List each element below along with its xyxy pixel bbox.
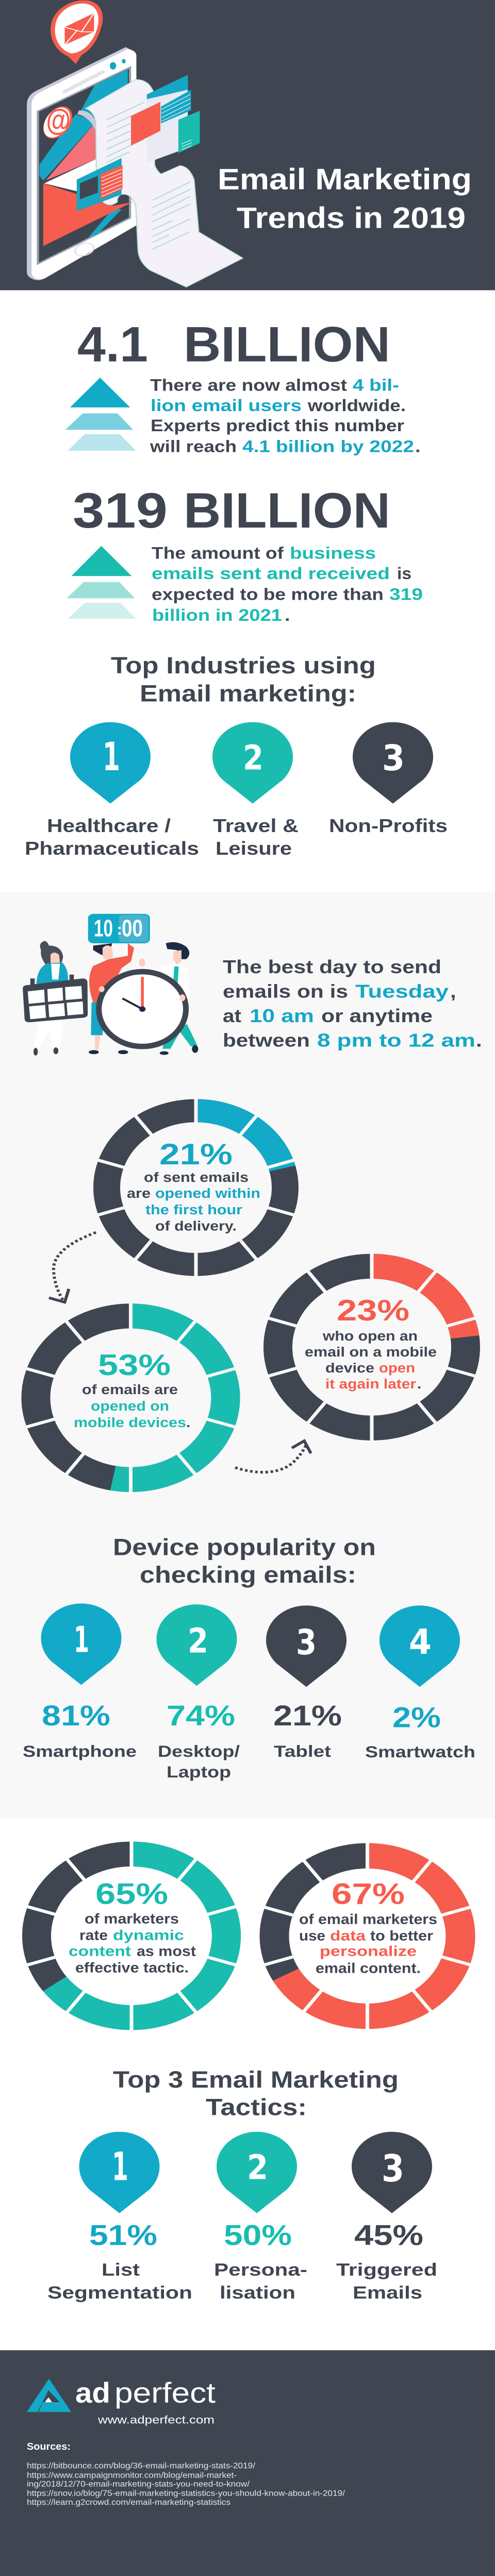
donut: 21% opened within first hour: are xyxy=(127,1186,151,1200)
device 1: smartphone: 81% xyxy=(42,1700,110,1732)
tactic 1: list segmentation: Segmentation xyxy=(47,2282,192,2302)
title: Email Marketing xyxy=(218,163,472,196)
donut: 23% open again later: it again later xyxy=(325,1377,416,1392)
donut: 53% opened on mobile: mobile devices xyxy=(74,1415,186,1430)
sources list: https://bitbounce.com/blog/36-email-marketing-stats-2019/ xyxy=(27,2461,255,2470)
device 2: desktop laptop: 2 xyxy=(188,1621,208,1660)
icon: at symbol xyxy=(38,103,77,141)
donut: 67% personalize: of email marketers xyxy=(299,1911,437,1927)
donut: 53% opened on mobile: opened on xyxy=(91,1399,169,1414)
tactic 2: personalisation xyxy=(214,2132,307,2302)
pin 2 xyxy=(212,722,293,804)
donut: 53% opened on mobile: 53% xyxy=(98,1348,171,1382)
donut: 21% opened within first hour: opened within xyxy=(155,1186,260,1200)
labels: Leisure xyxy=(216,838,292,859)
big number: 319 xyxy=(73,483,168,538)
donut: 23% open again later: email on a mobile xyxy=(305,1345,437,1359)
logo: adperfect: perfect xyxy=(114,2377,216,2409)
pin 3 xyxy=(353,722,433,804)
tactic 3: triggered emails: Triggered xyxy=(336,2259,437,2279)
text: email users: 4 bil- xyxy=(353,376,399,395)
digital clock digits: 10 xyxy=(94,914,113,942)
tactic 3: triggered emails xyxy=(336,2132,437,2302)
device 3: tablet: Tablet xyxy=(274,1743,331,1761)
tactic 1: list segmentation: 1 xyxy=(112,2144,128,2190)
icon: teal pyramid xyxy=(67,546,136,619)
donut: 67% personalize: email content. xyxy=(316,1960,421,1976)
heading xyxy=(113,2066,399,2121)
device 1: smartphone: Smartphone xyxy=(23,1743,137,1761)
digital clock digits: : xyxy=(117,921,122,938)
man in red sweater xyxy=(89,943,134,1054)
donut: 65% dynamic content: dynamic xyxy=(113,1928,184,1943)
panel: light timing and device section xyxy=(0,892,495,1818)
text: business emails: billion in 2021 xyxy=(152,606,282,625)
arrow: dotted curve to 53% donut xyxy=(49,1232,96,1302)
device 2: desktop laptop: 74% xyxy=(167,1700,235,1732)
device 3: tablet: 3 xyxy=(296,1622,317,1663)
donut: 65% dynamic content: as most xyxy=(137,1944,196,1959)
text: business emails xyxy=(152,544,423,625)
wall clock xyxy=(96,969,189,1049)
device 2: desktop laptop: Desktop/ xyxy=(158,1743,240,1761)
text: best day to send: , xyxy=(450,981,456,1002)
text: email users: worldwide. xyxy=(307,396,406,415)
sources heading: Sources: xyxy=(27,2441,71,2452)
donut: 21% opened within first hour: of sent emails xyxy=(144,1170,249,1184)
device 4: smartwatch: Smartwatch xyxy=(365,1743,475,1761)
donut: 21% opened within first hour: of delivery. xyxy=(155,1219,237,1233)
donut: 67% personalize: personalize xyxy=(320,1944,417,1959)
logo: adperfect: ad xyxy=(75,2377,110,2409)
donut: 65% dynamic content: effective tactic. xyxy=(75,1960,189,1976)
donut: 23% open again later: open xyxy=(379,1361,415,1375)
heading: Top 3 Email Marketing xyxy=(113,2066,399,2093)
text: best day to send: The best day to send xyxy=(223,957,441,978)
text: best day to send: . xyxy=(476,1030,482,1051)
panel: top industries xyxy=(25,652,448,859)
text: best day to send: between xyxy=(223,1030,310,1051)
text: email users: There are now almost xyxy=(150,376,347,395)
text: email users: Experts predict this number xyxy=(151,416,404,435)
digital clock digits xyxy=(94,914,143,942)
text: business emails: is xyxy=(397,564,411,583)
logo: adperfect xyxy=(27,2377,216,2412)
donut: 67% personalize: 67% xyxy=(332,1877,405,1911)
tactic 2: personalisation: lisation xyxy=(220,2282,295,2302)
text: business emails: . xyxy=(285,606,290,625)
arrow: dotted curve to 23% donut xyxy=(235,1441,311,1472)
donut: 67% personalize: data xyxy=(330,1928,366,1944)
device 4: smartwatch xyxy=(365,1605,475,1761)
text: business emails: expected to be more than xyxy=(152,585,384,604)
device 1: smartphone: 1 xyxy=(74,1619,89,1660)
labels: Travel & xyxy=(213,816,299,836)
title: Trends in 2019 xyxy=(237,201,466,234)
tactic 2: personalisation: Persona- xyxy=(214,2259,307,2279)
digital clock display xyxy=(88,914,150,943)
donut: 23% open again later xyxy=(267,1251,477,1443)
man in white coat xyxy=(139,942,198,1055)
text: best day to send: at xyxy=(223,1006,241,1026)
text: best day to send: or anytime xyxy=(321,1006,433,1026)
text: business emails: emails sent and received xyxy=(152,564,390,583)
donut: 21% opened within first hour: 21% xyxy=(159,1138,233,1171)
donut: 53% opened on mobile: . xyxy=(186,1415,190,1430)
text: email users: . xyxy=(415,437,421,456)
paper scroll xyxy=(77,79,243,287)
website url: www.adperfect.com xyxy=(97,2414,214,2426)
device 4: smartwatch: 2% xyxy=(392,1701,441,1733)
text: best day to send: emails on is xyxy=(223,981,348,1002)
email windows xyxy=(77,75,200,211)
heading xyxy=(111,652,376,706)
tactic 1: list segmentation: 51% xyxy=(89,2219,157,2251)
sources list: ing/2018/12/70-email-marketing-stats-you-need-to-know/ xyxy=(27,2480,250,2488)
sources list: https://www.campaignmonitor.com/blog/email-market- xyxy=(27,2470,237,2480)
donut: 23% open again later: device xyxy=(325,1361,374,1375)
donut: 21% opened within first hour: the first hour xyxy=(145,1202,242,1217)
donut: 23% open again later: who open an xyxy=(322,1329,418,1343)
donut: 65% dynamic content: rate xyxy=(79,1928,108,1943)
tactic 3: triggered emails: 3 xyxy=(382,2147,404,2191)
panel: top tactics xyxy=(47,2066,437,2302)
stat block: 4.1 billion xyxy=(65,317,421,456)
labels: Non-Profits xyxy=(329,816,448,836)
tactic 3: triggered emails: 45% xyxy=(354,2219,423,2251)
device 1: smartphone xyxy=(23,1603,137,1761)
pin 2: 2 xyxy=(243,738,263,777)
donut: 65% dynamic content xyxy=(25,1839,238,2032)
envelope on phone screen xyxy=(43,122,133,246)
text: best day to send: 10 am xyxy=(250,1006,314,1026)
device 2: desktop laptop xyxy=(157,1604,240,1781)
text: business emails: 319 xyxy=(389,585,423,604)
device 2: desktop laptop: Laptop xyxy=(167,1764,231,1781)
big number: BILLION xyxy=(184,483,390,538)
big number: 4.1 xyxy=(77,317,148,372)
digital clock digits: 00 xyxy=(122,914,143,942)
heading: device popularity: checking emails: xyxy=(140,1562,356,1588)
device 3: tablet xyxy=(266,1605,346,1761)
panel: hero header xyxy=(0,0,495,290)
text: business emails: business xyxy=(290,544,376,563)
icon: envelope speech bubble xyxy=(51,0,103,64)
sources list: https://snov.io/blog/75-email-marketing-statistics-you-should-know-about-in-2019/ xyxy=(27,2489,345,2498)
labels xyxy=(25,816,448,859)
title xyxy=(218,163,472,234)
big number: BILLION xyxy=(184,317,390,372)
big number xyxy=(73,483,390,538)
heading: device popularity: Device popularity on xyxy=(113,1534,376,1561)
donut: 67% personalize xyxy=(262,1841,472,2031)
donut: 65% dynamic content: content xyxy=(69,1944,131,1959)
device 4: smartwatch: 4 xyxy=(409,1622,432,1662)
pin 1: 1 xyxy=(103,735,120,779)
icon: blue pyramid xyxy=(65,378,136,451)
heading: Tactics: xyxy=(206,2094,307,2121)
heading: Email marketing: xyxy=(140,681,356,706)
tactic 1: list segmentation: List xyxy=(102,2259,140,2279)
panel: footer xyxy=(0,2350,495,2576)
phone body xyxy=(27,47,136,280)
calendar xyxy=(23,975,88,1022)
text: best day to send: Tuesday xyxy=(355,981,449,1002)
donut: 53% opened on mobile xyxy=(24,1301,237,1494)
donut: 53% opened on mobile: of emails are xyxy=(82,1382,178,1397)
donut: 67% personalize: to better xyxy=(370,1928,433,1944)
tactic 3: triggered emails: Emails xyxy=(353,2282,422,2302)
woman with calendar xyxy=(34,941,68,1056)
text: business emails: The amount of xyxy=(152,544,284,563)
donut: 67% personalize: use xyxy=(299,1928,325,1944)
tactic 1: list segmentation xyxy=(47,2132,192,2302)
donut: 65% dynamic content: of marketers xyxy=(85,1911,179,1927)
donut: 65% dynamic content: 65% xyxy=(95,1877,168,1911)
tactic 2: personalisation: 50% xyxy=(224,2219,292,2251)
big number xyxy=(77,317,390,372)
pin 1 xyxy=(70,722,151,804)
device 3: tablet: 21% xyxy=(273,1700,342,1732)
labels: Healthcare / xyxy=(47,816,171,836)
text: email users: will reach xyxy=(150,437,237,456)
text: email users: 4.1 billion by 2022 xyxy=(242,437,414,456)
text: email users xyxy=(150,376,421,456)
sources list xyxy=(27,2461,345,2507)
heading: device popularity xyxy=(113,1534,376,1588)
illustration: phone sending email xyxy=(27,0,243,287)
icon: at symbol: @ xyxy=(46,103,71,137)
stat block: 319 billion xyxy=(67,483,423,625)
donut: 21% opened within first hour xyxy=(96,1097,296,1278)
donut: 23% open again later: 23% xyxy=(337,1294,409,1327)
donut: 23% open again later: . xyxy=(417,1377,421,1392)
text: best day to send xyxy=(223,957,482,1051)
heading: Top Industries using xyxy=(111,652,376,679)
text: best day to send: 8 pm to 12 am xyxy=(317,1030,475,1051)
tactic 2: personalisation: 2 xyxy=(247,2148,268,2187)
text: email users: lion email users xyxy=(151,396,302,415)
labels: Pharmaceuticals xyxy=(25,838,199,859)
illustration: people with clock and calendar xyxy=(23,914,198,1056)
pin 3: 3 xyxy=(382,737,405,779)
sources list: https://learn.g2crowd.com/email-marketing-statistics xyxy=(27,2498,230,2507)
